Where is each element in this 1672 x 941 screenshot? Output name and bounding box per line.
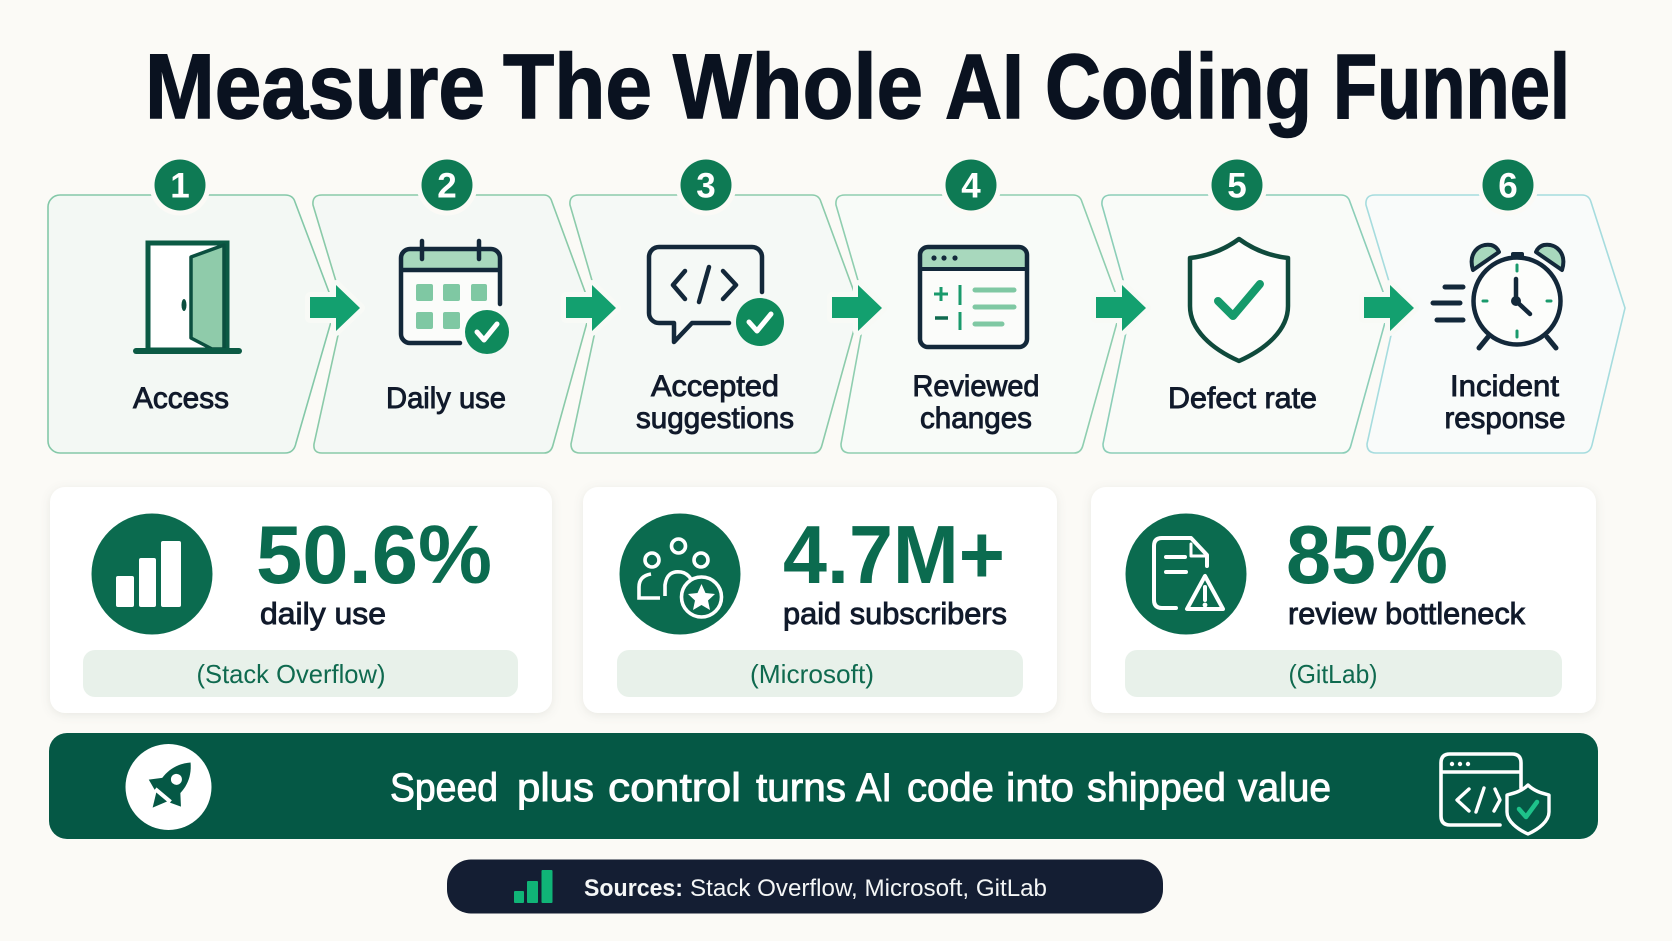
number badge 6 <box>1482 160 1534 210</box>
arrow 3 to 4 <box>832 285 882 331</box>
source pill: GitLab <box>1125 650 1562 697</box>
panel shape 1 <box>48 195 335 453</box>
title: Measure <box>145 36 485 138</box>
number badge 5 <box>1212 160 1262 210</box>
source pill: Microsoft <box>617 650 1023 697</box>
banner message: code <box>907 766 994 810</box>
label: Accepted suggestions: Accepted <box>651 370 779 403</box>
number badge 1: 1 <box>170 166 190 206</box>
title: The <box>503 36 652 138</box>
number badge 4: 4 <box>961 166 981 206</box>
label: Daily use: Daily use <box>386 382 506 415</box>
takeaway banner <box>49 733 1598 839</box>
title <box>145 36 1570 138</box>
number badge 3 <box>680 160 732 210</box>
title: Funnel <box>1333 36 1570 138</box>
number badge 6: 6 <box>1498 166 1518 206</box>
icon: code window with shield <box>1441 754 1549 834</box>
label: Reviewed changes <box>912 370 1040 435</box>
icon: bar chart <box>92 514 212 634</box>
source pill: Stack Overflow: (Stack Overflow) <box>196 659 386 689</box>
arrow 1 to 2 <box>310 285 360 331</box>
stat card: daily use <box>50 487 552 713</box>
sources bar <box>447 860 1163 914</box>
number badge 5: 5 <box>1227 166 1247 206</box>
number badge 3: 3 <box>696 166 716 206</box>
stat label: daily use: daily use <box>260 596 386 631</box>
label: Incident response: Incident <box>1450 370 1560 403</box>
step 1: access <box>48 160 335 453</box>
stat: 50.6%: 50.6% <box>256 508 492 601</box>
icon: shield with check <box>1190 239 1288 361</box>
icon: calendar with check <box>401 241 509 354</box>
title: AI <box>945 36 1024 138</box>
step 4: reviewed changes <box>836 160 1121 453</box>
stat label: review bottleneck: review bottleneck <box>1288 596 1525 631</box>
label: Access: Access <box>133 382 229 415</box>
step 2: daily use <box>313 160 591 453</box>
label: Incident response <box>1444 370 1566 435</box>
icon: document with warning <box>1126 514 1246 634</box>
icon: rocket <box>126 744 212 830</box>
banner message <box>390 766 1331 810</box>
arrow 4 to 5 <box>1096 285 1146 331</box>
sources text: Stack Overflow, Microsoft, GitLab <box>690 875 1047 902</box>
step 5: defect rate <box>1102 160 1389 453</box>
source pill: GitLab: (GitLab) <box>1288 659 1378 689</box>
banner message: control <box>608 766 741 810</box>
title: Coding <box>1045 36 1312 138</box>
panel shape 2 <box>313 195 591 453</box>
label: Accepted suggestions: suggestions <box>636 402 794 435</box>
title: Whole <box>673 36 923 138</box>
label: Reviewed changes: Reviewed <box>912 370 1040 403</box>
number badge 1 <box>154 160 206 210</box>
stat card: review bottleneck <box>1091 487 1596 713</box>
stat label: paid subscribers: paid subscribers <box>783 596 1007 631</box>
icon: green bars <box>514 870 552 903</box>
icon: alarm clock with speed lines <box>1433 245 1563 348</box>
stat: 85%: 85% <box>1286 508 1448 601</box>
step 6: incident response <box>1366 160 1625 453</box>
arrow 2 to 3 <box>566 285 616 331</box>
banner message: turns <box>756 766 846 810</box>
number badge 4 <box>946 160 996 210</box>
panel shape 5 <box>1102 195 1389 453</box>
icon: users with star <box>620 514 740 634</box>
source pill: Microsoft: (Microsoft) <box>750 659 874 689</box>
icon: code diff window <box>920 247 1027 347</box>
banner message: plus <box>517 766 594 810</box>
number badge 2: 2 <box>437 166 457 206</box>
panel shape 3 <box>570 195 860 453</box>
label: Defect rate: Defect rate <box>1168 382 1317 415</box>
arrow 5 to 6 <box>1364 285 1414 331</box>
icon: code speech bubble with check <box>649 247 784 346</box>
banner message: value <box>1238 766 1331 810</box>
banner message: shipped <box>1087 766 1226 810</box>
icon: open door <box>133 243 242 354</box>
panel shape 6 <box>1366 195 1625 453</box>
label: Accepted suggestions <box>636 370 794 435</box>
banner message: AI <box>856 766 892 810</box>
banner message: into <box>1006 766 1074 810</box>
sources text: Sources: <box>584 875 683 902</box>
number badge 2 <box>422 160 472 210</box>
step 3: accepted suggestions <box>570 160 860 453</box>
banner message: Speed <box>390 766 498 810</box>
panel shape 4 <box>836 195 1121 453</box>
source pill: Stack Overflow <box>83 650 518 697</box>
label: Reviewed changes: changes <box>920 402 1032 435</box>
label: Incident response: response <box>1444 402 1566 435</box>
stat: 4.7M+: 4.7M+ <box>783 508 1005 601</box>
stat card: paid subscribers <box>583 487 1057 713</box>
